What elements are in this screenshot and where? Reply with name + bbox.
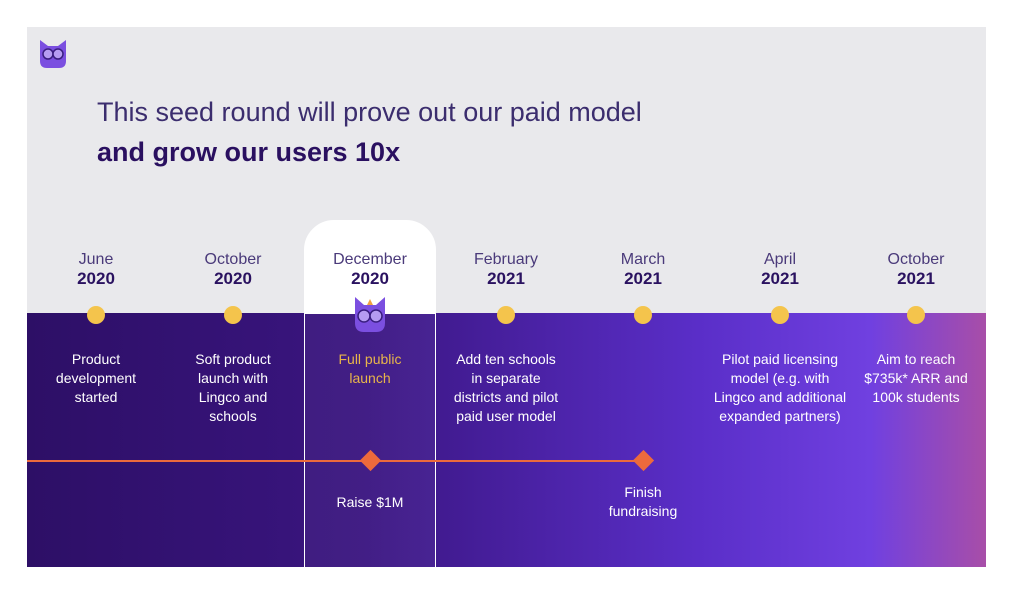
fundraising line [27,460,647,462]
slide: Full public [338,351,402,367]
slide: March [621,251,665,268]
slide: $735k* ARR and [864,370,968,386]
slide: 2020 [214,269,252,288]
slide: October [205,251,261,268]
descriptions: Product [72,351,120,367]
slide: fundraising [609,503,677,519]
slide: Soft product [195,351,271,367]
slide: Finish [624,484,662,500]
purple band [27,313,986,567]
timeline columns [77,251,115,288]
icon: cat mascot [355,297,385,332]
slide: paid user model [456,408,556,424]
slide: December [333,251,407,268]
slide: 2021 [624,269,662,288]
slide: schools [209,408,257,424]
slide: launch [349,370,391,386]
slide: February [474,251,538,268]
dots [87,306,105,324]
fundraising labels: Raise $1M [337,494,403,510]
descriptions [56,351,136,405]
slide: launch with [198,370,268,386]
slide: Lingco and [199,389,267,405]
timeline columns: June [79,251,113,268]
slide: 2021 [487,269,525,288]
slide: 2020 [351,269,389,288]
slide: Lingco and additional [714,389,846,405]
slide: Aim to reach [877,351,955,367]
descriptions: started [75,389,117,405]
title [97,97,642,167]
slide: April [764,251,796,268]
descriptions: development [56,370,136,386]
title: This seed round will prove out our paid model [97,97,642,127]
slide: expanded partners) [719,408,841,424]
logo icon [40,40,66,68]
slide: Add ten schools [456,351,556,367]
timeline columns: 2020 [77,269,115,288]
highlight card: December [304,220,436,582]
slide: model (e.g. with [731,370,829,386]
slide: Pilot paid licensing [722,351,838,367]
slide: in separate [471,370,541,386]
title: and grow our users 10x [97,137,400,167]
slide: districts and pilot [454,389,558,405]
slide: 2021 [761,269,799,288]
slide: October [888,251,944,268]
slide: 100k students [872,389,960,405]
slide: 2021 [897,269,935,288]
